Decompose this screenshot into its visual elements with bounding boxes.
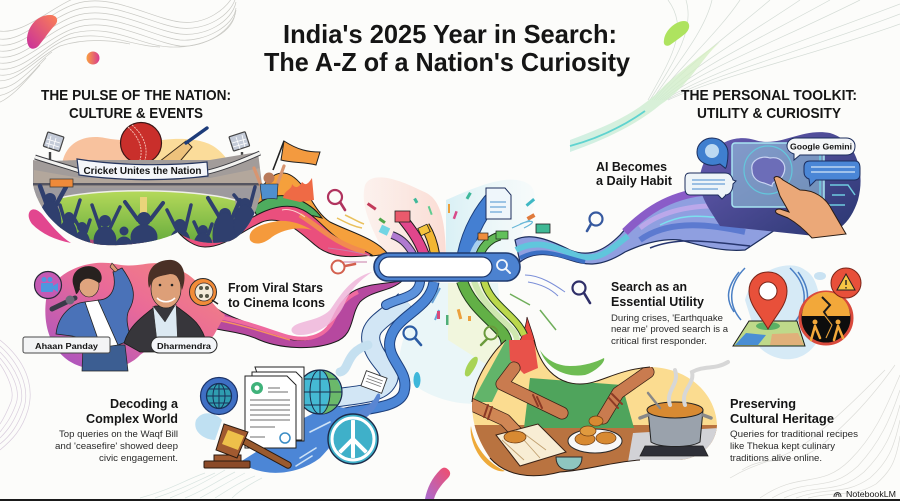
decorative contour lines: lower left — [0, 340, 30, 450]
stadium roof — [35, 153, 260, 172]
icon: map — [733, 321, 805, 346]
small orange flag — [50, 179, 73, 187]
steam — [669, 362, 728, 405]
decorative contour lines: top right fan — [648, 0, 900, 100]
NotebookLM watermark: NotebookLM — [846, 489, 896, 499]
icon: gavel — [204, 424, 288, 468]
icon: cricket bat — [155, 128, 207, 166]
text: essential utility — [611, 279, 729, 347]
text: AI becomes a daily habit: AI Becomes — [596, 159, 667, 174]
teal drop — [414, 372, 420, 388]
icon: document stack — [245, 367, 304, 448]
label: Ahaan Panday — [23, 337, 110, 353]
crowd silhouettes — [38, 184, 257, 246]
text: preserving cultural heritage: Cultural Heritage — [730, 411, 834, 426]
panel: complex world — [195, 367, 420, 473]
signal arcs — [729, 268, 808, 322]
icon: magnifier green — [481, 326, 498, 345]
upward streams — [392, 196, 500, 254]
text: decoding a complex world: civic engagement. — [99, 453, 178, 464]
text: decoding a complex world: and 'ceasefire' showed deep — [55, 441, 178, 452]
plate of thekua — [568, 416, 622, 453]
person: Dharmendra — [124, 260, 210, 352]
cooking scene — [472, 340, 717, 476]
centre shapes from search bar — [328, 188, 565, 330]
text: AI becomes a daily habit — [596, 159, 673, 188]
icon: small document — [361, 371, 387, 393]
icon: cricket ball — [120, 122, 162, 164]
banner: Cricket Unites the Nation — [84, 166, 202, 177]
icon: video camera — [34, 272, 62, 298]
white gap with leaf swoosh — [540, 350, 604, 376]
icon: recipe book — [496, 424, 566, 466]
search bar — [374, 253, 520, 281]
icon: magnifier right blue — [587, 212, 602, 231]
icon: location pin — [749, 272, 787, 329]
icon: peace symbol — [328, 414, 378, 464]
text: essential utility: During crises, 'Earthquake — [611, 313, 723, 324]
brain icon — [744, 146, 792, 194]
dark backdrop — [700, 132, 861, 236]
text: decoding a complex world: Complex World — [86, 411, 178, 426]
text: decoding a complex world — [55, 396, 179, 464]
heading: pulse of the nation: THE PULSE OF THE NATION: — [41, 87, 231, 104]
icon: film reel — [190, 278, 218, 306]
pink soft swoosh near ribbon — [291, 272, 372, 335]
label: Dharmendra: Dharmendra — [157, 341, 211, 351]
icon: search magnifier — [497, 260, 510, 273]
panel: cricket — [33, 122, 262, 246]
blue backdrop — [240, 405, 368, 473]
bottom pink swoosh — [425, 468, 450, 499]
heading: personal toolkit: THE PERSONAL TOOLKIT: — [681, 87, 857, 104]
decorative contour lines: top left — [0, 0, 236, 104]
panel: AI daily habit — [685, 132, 861, 238]
icon: document — [486, 188, 511, 219]
stream highlights — [296, 422, 330, 466]
icon: magnifier pink — [328, 190, 345, 210]
green ribbon streams — [462, 281, 524, 372]
orange swoosh below heritage — [471, 426, 505, 471]
ribbon: people stream from viral stars to search bar — [205, 281, 402, 348]
text: essential utility: critical first responder. — [611, 336, 707, 347]
icon: blue chat bubble — [804, 161, 860, 186]
text: preserving cultural heritage: Preserving — [730, 396, 796, 411]
bottom edge bar — [0, 499, 900, 501]
arms — [468, 368, 648, 436]
person: Ahaan Panday — [52, 263, 133, 371]
heading: personal toolkit: UTILITY & CURIOSITY — [697, 105, 841, 122]
ribbons: civic stream from search bar down to legal panel — [310, 282, 434, 430]
heading: pulse of the nation — [41, 87, 231, 122]
decorative contour lines: lower right — [730, 365, 900, 498]
text: essential utility: Essential Utility — [611, 294, 705, 309]
label: Google Gemini — [787, 138, 855, 160]
blue swoosh — [351, 394, 380, 423]
text: decoding a complex world: Top queries on the Waqf Bill — [59, 429, 178, 440]
main title — [264, 19, 631, 77]
pale blue backdrop — [745, 265, 820, 359]
top right green blob — [664, 21, 689, 46]
text: viral stars: to Cinema Icons — [228, 295, 325, 310]
label: Ahaan Panday: Ahaan Panday — [35, 341, 98, 351]
thekua in hand — [504, 431, 526, 443]
heading: personal toolkit — [681, 87, 857, 122]
icon: brain bubble — [697, 138, 728, 168]
holographic screen — [732, 143, 824, 207]
text: preserving cultural heritage: traditions alive online. — [730, 453, 822, 464]
centre colour wash — [364, 177, 535, 404]
heritage outline — [472, 340, 650, 476]
heading: pulse of the nation: CULTURE & EVENTS — [69, 105, 203, 122]
orange swoosh under ribbon — [250, 221, 312, 244]
icon: earthquake — [800, 292, 852, 344]
floating coloured tiles — [395, 211, 410, 222]
text: AI becomes a daily habit: a Daily Habit — [596, 173, 673, 188]
decorative swoosh: green and teal — [570, 42, 720, 152]
small bowl — [556, 457, 582, 470]
screen lines — [820, 150, 855, 215]
text: preserving cultural heritage: Queries for traditional recipes — [730, 429, 858, 440]
cooking pot on stove — [640, 393, 711, 456]
icon: warning — [831, 268, 861, 298]
lime blob near heritage — [465, 357, 478, 376]
text: viral stars — [228, 280, 325, 310]
icon: magnifier orange — [332, 260, 355, 274]
panel: essential utility — [729, 265, 861, 359]
text: viral stars: From Viral Stars — [228, 280, 323, 295]
ribbon: AI stream from search bar — [515, 190, 775, 264]
icon: white chat bubble — [685, 173, 736, 199]
icon: magnifier navy — [572, 282, 590, 303]
label: Google Gemini: Google Gemini — [790, 142, 852, 152]
icon: magnifier blue — [404, 326, 421, 345]
top left small dot — [86, 52, 100, 64]
text: preserving cultural heritage — [730, 396, 858, 464]
icon: globe large — [298, 370, 342, 414]
panel: viral stars and cinema icons — [23, 260, 225, 371]
panel: heritage — [462, 281, 728, 480]
text: essential utility: near me' proved search is a — [611, 324, 729, 335]
text: preserving cultural heritage: like Thekua kept culinary — [730, 441, 835, 452]
purple pink backdrop — [45, 263, 225, 369]
top left pink blob — [27, 15, 57, 49]
text: essential utility: Search as an — [611, 279, 687, 294]
decorative contour lines: bottom centre — [140, 470, 262, 498]
banner — [77, 159, 208, 180]
main title: The A-Z of a Nation's Curiosity — [264, 47, 631, 77]
fan with flag — [254, 141, 320, 202]
pink swoosh left of cricket — [29, 209, 71, 243]
label: Dharmendra — [151, 337, 217, 353]
main title: India's 2025 Year in Search: — [283, 19, 617, 49]
ribbon: culture stream from cricket into search bar — [178, 173, 388, 257]
red ribbon — [510, 317, 537, 362]
icon: right floodlight — [229, 132, 250, 160]
icon: pointing hand — [774, 177, 846, 238]
pale blue dot — [814, 272, 826, 280]
text: decoding a complex world: Decoding a — [110, 396, 179, 411]
icon: globe small — [200, 378, 238, 414]
icon: left floodlight — [43, 132, 64, 162]
stadium bowl — [33, 152, 262, 246]
light blue backdrop splashes — [195, 413, 222, 440]
sky glow — [62, 137, 229, 165]
